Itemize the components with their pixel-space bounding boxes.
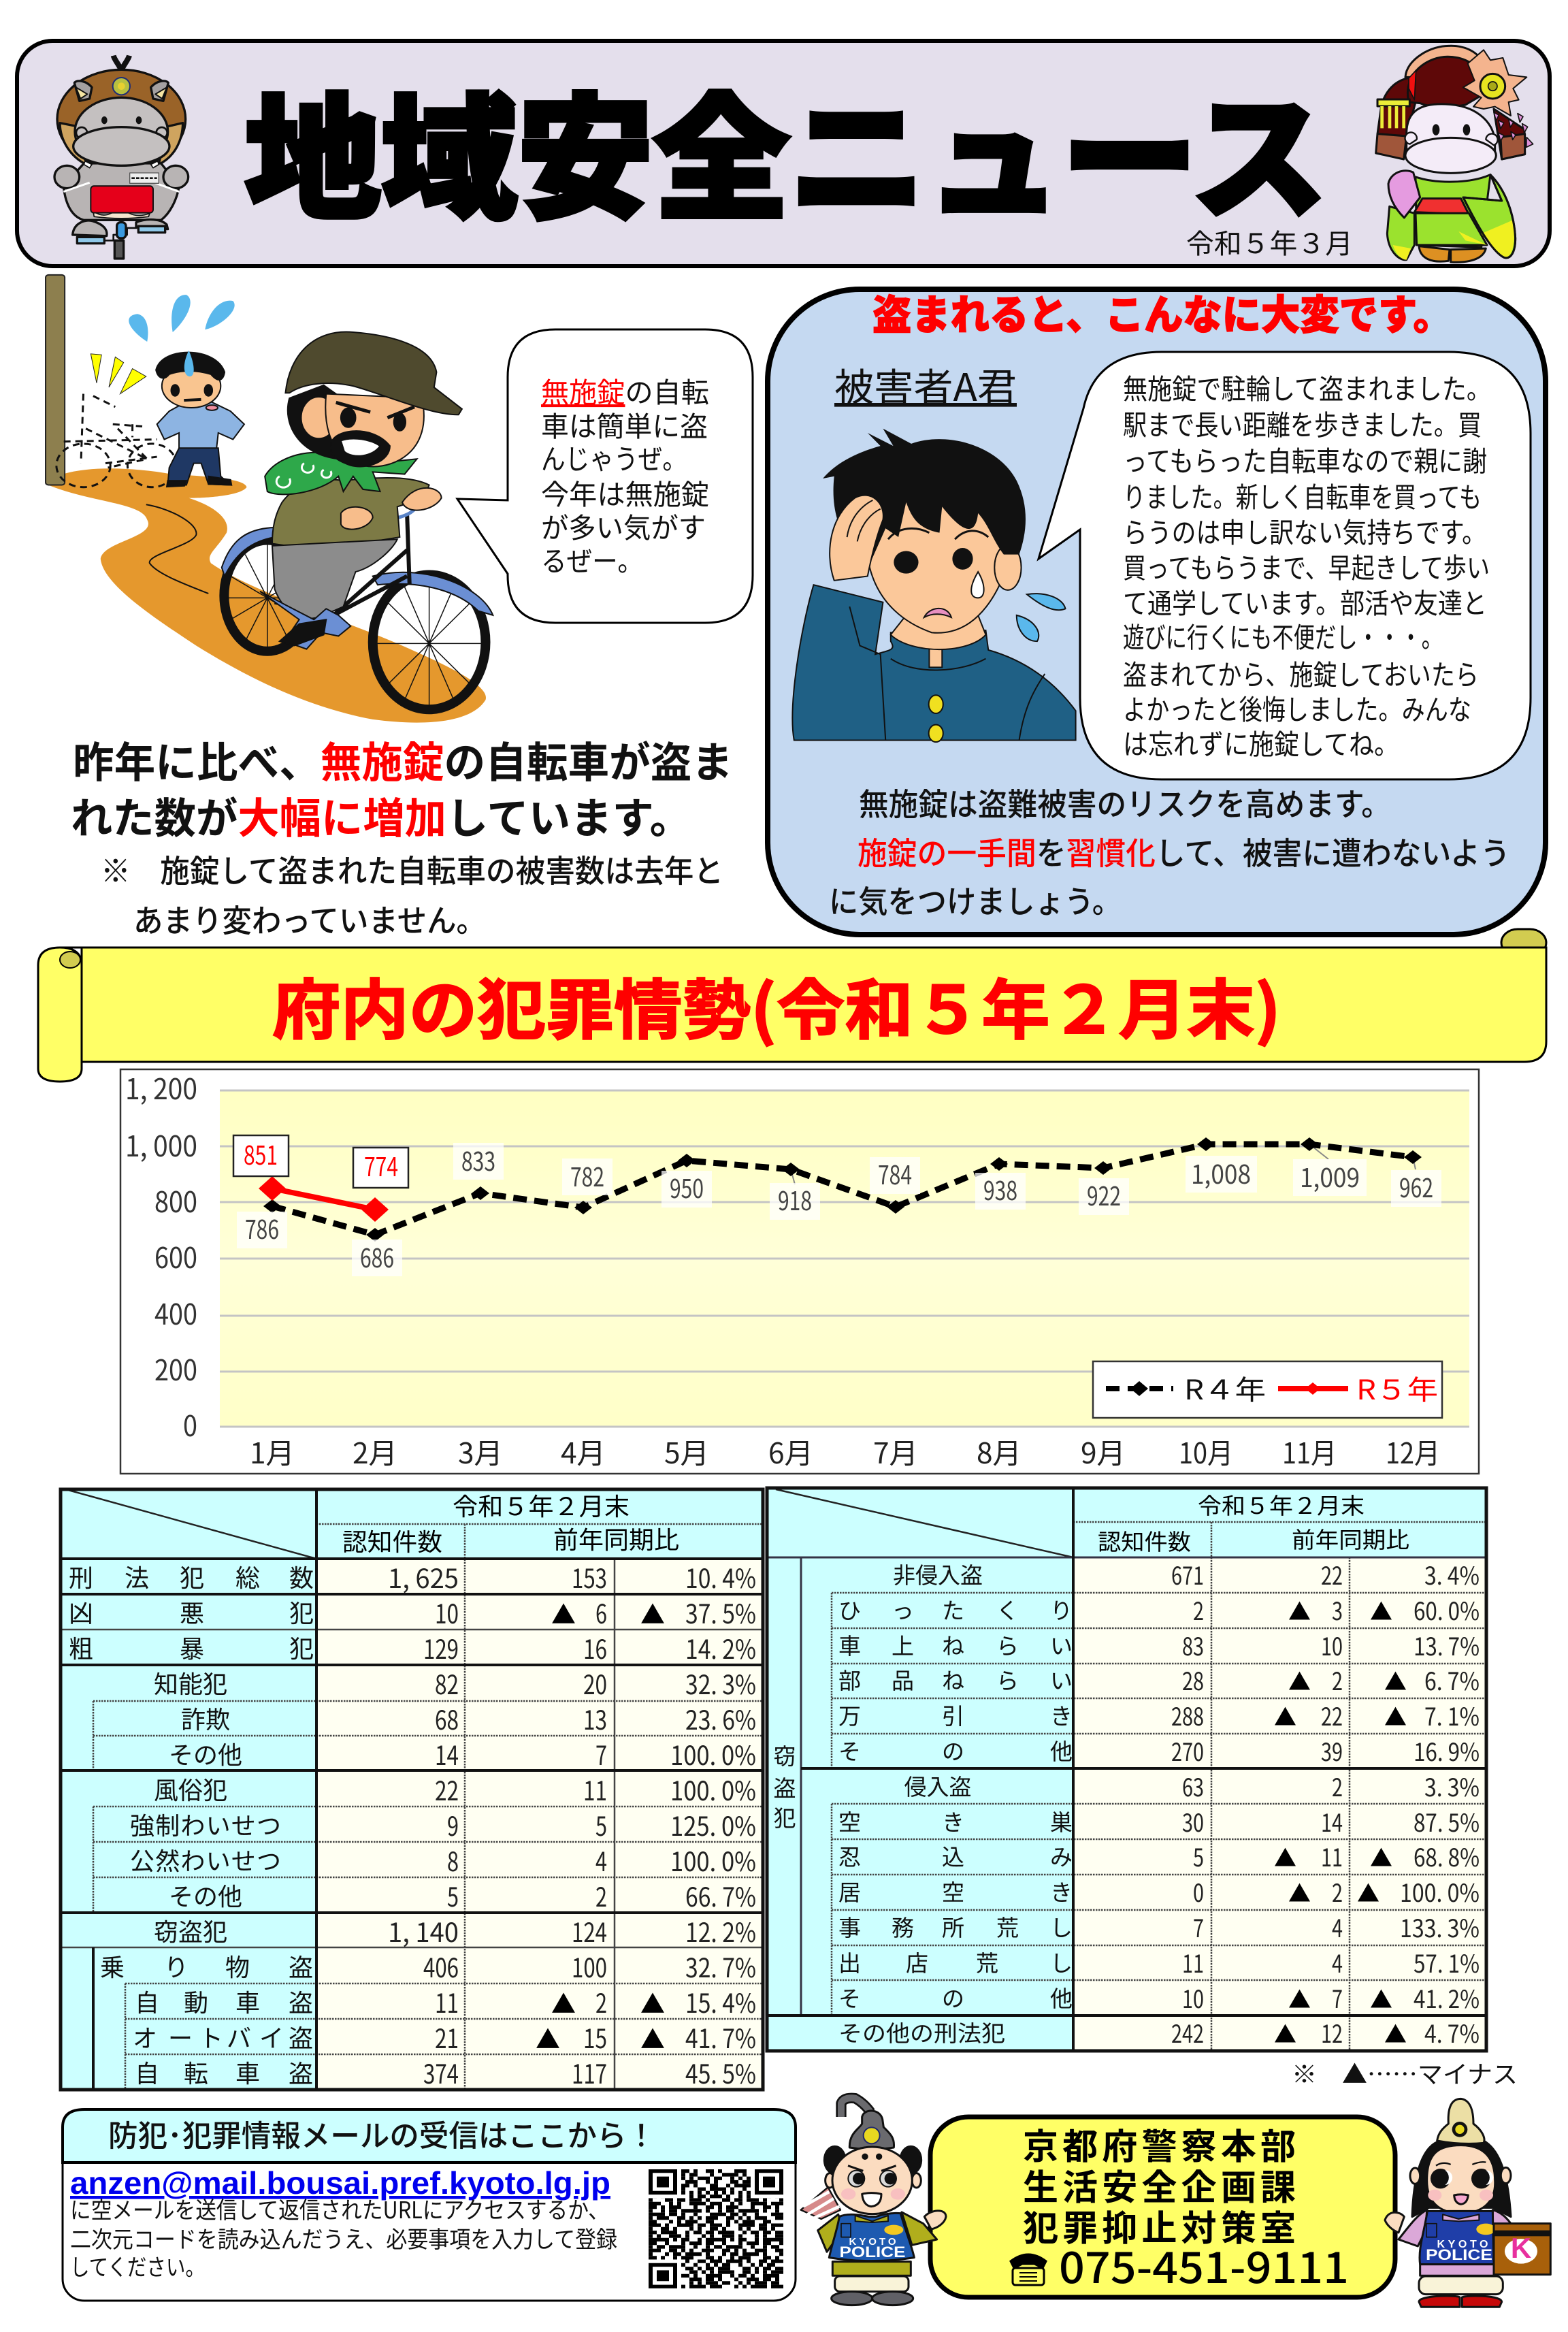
data labels <box>233 1135 1441 1276</box>
year-on-year change: ▲ <box>1288 1876 1311 1909</box>
legend: R５年 <box>1356 1368 1438 1408</box>
bubble text: て通学しています。部活や友達と <box>1123 581 1487 621</box>
icon: telephone <box>1011 2254 1046 2285</box>
contact text <box>1023 2118 1296 2251</box>
row labels: 空き巣 <box>838 1804 1073 1837</box>
text block: bicycle theft summary: 昨年に比べ、無施錠の自転車が盗ま <box>73 728 733 790</box>
boy <box>156 351 244 487</box>
row labels: 侵入盗 <box>904 1769 972 1802</box>
data labels: 782 <box>570 1156 604 1194</box>
mail instructions: に空メールを送信して返信されたURLにアクセスするか、 <box>70 2192 609 2225</box>
bubble text: るぜー。 <box>541 538 643 579</box>
x axis labels: 7月 <box>873 1431 918 1472</box>
percentage change: 68. 8% <box>1414 1839 1480 1874</box>
row labels: その他 <box>838 1734 1073 1766</box>
data labels: 938 <box>983 1170 1017 1208</box>
row labels <box>838 1557 1073 2048</box>
percentage change: ▲ <box>1370 1594 1392 1627</box>
year-on-year change: 3 <box>1332 1592 1343 1627</box>
mail instructions: してください。 <box>70 2249 205 2282</box>
row labels: その他 <box>169 1877 242 1913</box>
bubble text: らうのは申し訳ない気持ちです。 <box>1123 510 1486 551</box>
counts: 1, 140 <box>388 1912 459 1950</box>
counts: 129 <box>423 1629 459 1667</box>
percentage change: 100. 0% <box>1400 1874 1480 1909</box>
counts: 28 <box>1182 1662 1204 1698</box>
table header: 認知件数 <box>342 1523 442 1558</box>
counts: 2 <box>1193 1592 1204 1627</box>
percentage change: 133. 3% <box>1400 1909 1480 1945</box>
bubble text <box>1123 366 1491 762</box>
bubble text: 今年は無施錠 <box>541 472 709 513</box>
year-on-year change: 20 <box>583 1664 607 1702</box>
scroll banner <box>38 929 1546 1082</box>
row labels: 出店荒し <box>838 1945 1073 1978</box>
panel: thief on bicycle illustration <box>45 275 493 723</box>
year-on-year change: ▲ <box>1274 2017 1296 2050</box>
speech bubble: thief <box>457 329 753 623</box>
percentage change: 15. 4% <box>685 1983 756 2021</box>
counts: 7 <box>1193 1909 1204 1945</box>
year-on-year change: 15 <box>583 2018 607 2056</box>
percentage change: ▲ <box>1384 2017 1407 2050</box>
sweat drops <box>129 295 235 342</box>
bubble text: 遊びに行くにも不便だし・・・。 <box>1123 615 1443 655</box>
icon: maiko mascot right <box>1376 46 1533 262</box>
percentage change: 16. 9% <box>1414 1733 1480 1768</box>
thief head <box>288 385 424 466</box>
year-on-year change: 7 <box>1332 1980 1343 2015</box>
year-on-year change <box>536 1558 607 2092</box>
year-on-year change: 11 <box>583 1770 607 1809</box>
x axis labels: 8月 <box>977 1431 1022 1472</box>
percentage change: ▲ <box>1357 1876 1379 1909</box>
counts: 63 <box>1182 1768 1204 1804</box>
panel conclusion text: 施錠の一手間を習慣化して、被害に遭わないよう <box>858 829 1510 874</box>
data labels: 1,008 <box>1191 1154 1251 1191</box>
percentage change: 45. 5% <box>685 2054 756 2092</box>
year-on-year change: 12 <box>1321 2015 1343 2050</box>
counts: 10 <box>435 1593 459 1632</box>
row labels: 忍込み <box>838 1839 1073 1872</box>
row labels: 事務所荒し <box>838 1910 1073 1943</box>
panel heading: 盗まれると、こんなに大変です。 <box>872 282 1452 342</box>
x axis labels: 5月 <box>664 1431 709 1472</box>
counts: 374 <box>423 2054 459 2092</box>
percentage change: 32. 7% <box>685 1947 756 1986</box>
row labels: 非侵入盗 <box>893 1557 983 1590</box>
percentage change: 3. 4% <box>1424 1557 1480 1592</box>
text block: bicycle theft summary: れた数が大幅に増加しています。 <box>71 784 691 845</box>
data labels: 918 <box>778 1180 812 1218</box>
table: left crime statistics <box>61 1487 763 2092</box>
percentage change: 60. 0% <box>1414 1592 1480 1627</box>
header banner <box>17 41 1550 266</box>
percentage change: 66. 7% <box>685 1877 756 1915</box>
year-on-year change: 124 <box>572 1912 607 1950</box>
table header <box>342 1487 679 1558</box>
row labels: オートバイ盗 <box>133 2019 313 2054</box>
alert spikes <box>91 354 146 394</box>
percentage change <box>1357 1557 1480 2050</box>
percentage change: 37. 5% <box>685 1593 756 1632</box>
percentage change: 14. 2% <box>685 1629 756 1667</box>
legend <box>1093 1361 1442 1418</box>
row labels: その他 <box>838 1981 1073 2013</box>
vertical label: 窃 <box>773 1738 796 1771</box>
y axis labels: 200 <box>154 1348 197 1389</box>
row labels: 自転車盗 <box>135 2054 313 2090</box>
counts: 21 <box>435 2018 459 2056</box>
icon: police mascot male <box>801 2098 946 2305</box>
icon: police mascot female <box>1385 2099 1550 2307</box>
row labels: 公然わいせつ <box>130 1842 281 1877</box>
vertical label <box>773 1738 796 1833</box>
x axis labels: 6月 <box>768 1431 813 1472</box>
counts: 288 <box>1171 1698 1204 1733</box>
row labels: 風俗犯 <box>154 1771 227 1807</box>
percentage change: 6. 7% <box>1424 1662 1480 1698</box>
percentage change: 13. 7% <box>1414 1627 1480 1663</box>
percentage change: 57. 1% <box>1414 1945 1480 1980</box>
thief scarf <box>265 453 417 494</box>
counts: 14 <box>435 1735 459 1773</box>
title: 地域安全ニュース <box>245 51 1327 246</box>
panel: crime mail signup <box>63 2109 796 2301</box>
percentage change: 4. 7% <box>1424 2015 1480 2050</box>
panel conclusion text: に気をつけましょう。 <box>829 877 1122 922</box>
year-on-year change <box>1274 1557 1343 2050</box>
panel conclusion text: 無施錠は盗難被害のリスクを高めます。 <box>859 780 1391 825</box>
x axis labels: 10月 <box>1179 1431 1233 1472</box>
row labels: 凶悪犯 <box>69 1594 314 1630</box>
bubble text: 車は簡単に盗 <box>541 404 708 444</box>
x axis labels: 12月 <box>1386 1431 1440 1472</box>
legend: R４年 <box>1184 1368 1266 1408</box>
x axis labels: 2月 <box>353 1431 397 1472</box>
percentage change: 87. 5% <box>1414 1804 1480 1839</box>
year-on-year change: 14 <box>1321 1804 1343 1839</box>
year-on-year change: 39 <box>1321 1733 1343 1768</box>
counts: 22 <box>435 1770 459 1809</box>
icon: hippo mascot left <box>54 56 189 259</box>
row labels: 詐欺 <box>181 1700 230 1736</box>
year-on-year change: 2 <box>595 1983 607 2021</box>
percentage change: 7. 1% <box>1424 1698 1480 1733</box>
road line <box>146 504 208 594</box>
percentage change: 100. 0% <box>670 1735 756 1773</box>
mail heading: 防犯･犯罪情報メールの受信はここから！ <box>108 2111 656 2155</box>
counts: 10 <box>1182 1980 1204 2015</box>
mail instructions <box>70 2192 617 2282</box>
text block: bicycle theft summary <box>71 728 733 941</box>
counts: 5 <box>447 1877 459 1915</box>
year-on-year change: 10 <box>1321 1627 1343 1663</box>
year-on-year change: 2 <box>1332 1768 1343 1804</box>
counts: 0 <box>1193 1874 1204 1909</box>
row labels: ひったくり <box>838 1593 1073 1625</box>
year-on-year change: ▲ <box>1288 1982 1311 2015</box>
row labels: 車上ねらい <box>838 1628 1073 1661</box>
x axis labels: 4月 <box>561 1431 606 1472</box>
percentage change: 41. 2% <box>1414 1980 1480 2015</box>
row labels: 刑法犯総数 <box>69 1559 314 1594</box>
bubble text: 無施錠で駐輪して盗まれました。 <box>1123 366 1491 407</box>
data labels: 950 <box>670 1168 704 1205</box>
thief body <box>260 478 442 649</box>
year-on-year change: ▲ <box>551 1596 576 1631</box>
thief front wheel <box>373 575 485 709</box>
percentage change: 3. 3% <box>1424 1768 1480 1804</box>
percentage change: 41. 7% <box>685 2018 756 2056</box>
series: R5 <box>259 1176 389 1222</box>
year-on-year change: 2 <box>1332 1662 1343 1698</box>
vertical label: 盗 <box>773 1770 796 1803</box>
panel: victim story <box>768 282 1546 935</box>
percentage change: 23. 6% <box>685 1700 756 1738</box>
y axis labels: 1, 200 <box>125 1067 197 1108</box>
row labels <box>69 1559 314 2090</box>
percentage change <box>640 1558 756 2092</box>
year-on-year change: 5 <box>595 1806 607 1844</box>
table: right theft statistics <box>767 1488 1486 2051</box>
counts: 8 <box>447 1841 459 1879</box>
percentage change: ▲ <box>640 1596 665 1631</box>
row labels: 窃盗犯 <box>154 1913 227 1948</box>
percentage change: ▲ <box>1370 1982 1392 2015</box>
table header: 令和５年２月末 <box>453 1487 630 1523</box>
text block: bicycle theft summary: あまり変わっていません。 <box>133 896 486 941</box>
year-on-year change: 22 <box>1321 1557 1343 1592</box>
x axis labels: 3月 <box>458 1431 503 1472</box>
vertical label: 犯 <box>773 1800 796 1833</box>
counts: 270 <box>1171 1733 1204 1768</box>
QR code <box>649 2169 783 2288</box>
bubble text <box>541 370 709 579</box>
pole <box>46 275 65 485</box>
percentage change: 12. 2% <box>685 1912 756 1950</box>
row labels: 粗暴犯 <box>69 1630 314 1665</box>
series: R4 <box>263 1137 1422 1242</box>
year-on-year change: 11 <box>1321 1839 1343 1874</box>
row labels: 知能犯 <box>154 1665 227 1700</box>
mail address: anzen@mail.bousai.pref.kyoto.lg.jp <box>70 2165 610 2201</box>
speech bubble: victim <box>1039 352 1531 779</box>
x axis labels: 9月 <box>1081 1431 1126 1472</box>
bubble text: 買ってもらうまで、早起きして歩い <box>1123 545 1490 586</box>
contact text: 生活安全企画課 <box>1023 2159 1296 2210</box>
percentage change: ▲ <box>1384 1700 1407 1732</box>
counts <box>1171 1557 1204 2050</box>
y axis labels <box>125 1067 197 1445</box>
counts: 242 <box>1171 2015 1204 2050</box>
x axis labels: 1月 <box>250 1431 295 1472</box>
percentage change: 125. 0% <box>670 1806 756 1844</box>
year-on-year change: 2 <box>595 1877 607 1915</box>
bubble text: ってもらった自転車なので親に謝 <box>1123 438 1487 479</box>
year-on-year change: 117 <box>572 2054 607 2092</box>
counts: 671 <box>1171 1557 1204 1592</box>
counts: 11 <box>1182 1945 1204 1980</box>
stolen bicycle outline <box>56 394 176 487</box>
year-on-year change: 6 <box>595 1593 607 1632</box>
year-on-year change: 22 <box>1321 1698 1343 1733</box>
percentage change: ▲ <box>1370 1841 1392 1873</box>
table footnote: ※ ▲……マイナス <box>1292 2055 1518 2090</box>
data labels: 686 <box>360 1237 394 1275</box>
x axis labels <box>250 1431 1440 1472</box>
counts <box>388 1558 459 2092</box>
y axis labels: 400 <box>154 1292 197 1333</box>
counts: 30 <box>1182 1804 1204 1839</box>
bubble text: 無施錠の自転 <box>541 370 709 410</box>
year-on-year change: 100 <box>572 1947 607 1986</box>
counts: 5 <box>1193 1839 1204 1874</box>
counts: 83 <box>1182 1627 1204 1663</box>
icon: police mascot female: POLICE <box>1426 2246 1492 2263</box>
row labels: 自動車盗 <box>135 1983 313 2019</box>
counts: 68 <box>435 1700 459 1738</box>
bicycle frame <box>275 515 410 615</box>
year-on-year change: 13 <box>583 1700 607 1738</box>
year-on-year change: 4 <box>1332 1909 1343 1945</box>
counts: 406 <box>423 1947 459 1986</box>
bubble text: よかったと後悔しました。みんな <box>1123 687 1471 728</box>
row labels: その他 <box>169 1736 242 1771</box>
contact text: 京都府警察本部 <box>1023 2118 1296 2169</box>
x axis labels: 11月 <box>1282 1431 1337 1472</box>
data labels: 922 <box>1087 1176 1121 1213</box>
data labels: 1,009 <box>1300 1157 1360 1195</box>
badge text: KYOTO <box>1437 2239 1488 2250</box>
year-on-year change: 4 <box>595 1841 607 1879</box>
year-on-year change: ▲ <box>1288 1594 1311 1627</box>
y axis labels: 0 <box>183 1404 197 1445</box>
logo letter: K <box>1511 2232 1531 2264</box>
row labels: 乗り物盗 <box>100 1948 313 1983</box>
row labels: 強制わいせつ <box>130 1807 281 1842</box>
badge text: KYOTO <box>849 2236 896 2248</box>
date: 令和５年３月 <box>1186 222 1353 261</box>
data labels: 833 <box>461 1141 495 1178</box>
percentage change: 10. 4% <box>685 1558 756 1596</box>
percentage change: ▲ <box>640 2020 665 2056</box>
plot area <box>220 1090 1469 1427</box>
panel: police contact <box>930 2117 1395 2297</box>
year-on-year change: ▲ <box>1274 1700 1296 1732</box>
victim label: 被害者A君 <box>834 357 1017 412</box>
mail instructions: 二次元コードを読み込んだうえ、必要事項を入力して登録 <box>70 2221 617 2254</box>
contact text: 犯罪抑止対策室 <box>1023 2200 1296 2251</box>
table header: 認知件数 <box>1098 1524 1191 1557</box>
data labels: 774 <box>364 1146 398 1184</box>
bubble text: りました。新しく自転車を買っても <box>1123 474 1482 515</box>
year-on-year change: ▲ <box>536 2020 560 2056</box>
year-on-year change: 2 <box>1332 1874 1343 1909</box>
leader lines <box>791 1144 1416 1184</box>
road <box>45 468 486 723</box>
line chart <box>120 1067 1479 1474</box>
icon: police mascot male: POLICE <box>840 2244 905 2261</box>
banner heading: 府内の犯罪情勢(令和５年２月末) <box>272 958 1281 1052</box>
year-on-year change: ▲ <box>551 1985 576 2020</box>
table header <box>1098 1488 1409 1557</box>
counts: 1, 625 <box>388 1558 459 1596</box>
thief rear wheel <box>224 540 310 651</box>
bubble text: 駅まで長い距離を歩きました。買 <box>1123 402 1482 443</box>
bubble text: が多い気がす <box>541 505 706 546</box>
year-on-year change: 7 <box>595 1735 607 1773</box>
data labels: 784 <box>878 1154 912 1192</box>
bubble text: 盗まれてから、施錠しておいたら <box>1123 652 1479 693</box>
row labels: 万引き <box>838 1698 1073 1731</box>
data labels: 851 <box>244 1135 278 1172</box>
counts: 9 <box>447 1806 459 1844</box>
year-on-year change: 16 <box>583 1629 607 1667</box>
thief cap <box>285 332 462 415</box>
counts: 11 <box>435 1983 459 2021</box>
year-on-year change: ▲ <box>1288 1664 1311 1697</box>
data labels: 786 <box>245 1209 279 1246</box>
table header: 前年同期比 <box>553 1521 679 1556</box>
panel conclusion text <box>829 780 1510 922</box>
y axis labels: 600 <box>154 1235 197 1277</box>
bubble text: んじゃうぜ。 <box>541 436 687 477</box>
percentage change: ▲ <box>1384 1664 1407 1697</box>
percentage change: 100. 0% <box>670 1841 756 1879</box>
year-on-year change: ▲ <box>1274 1841 1296 1873</box>
phone number: 075-451-9111 <box>1059 2234 1349 2295</box>
icon: worried boy <box>792 429 1076 742</box>
y axis labels: 1, 000 <box>125 1124 197 1165</box>
row labels: 居空き <box>838 1875 1073 1907</box>
year-on-year change: 153 <box>572 1558 607 1596</box>
bubble text: は忘れずに施錠してね。 <box>1123 722 1399 762</box>
text block: bicycle theft summary: ※ 施錠して盗まれた自転車の被害数は去年と <box>101 847 723 892</box>
y axis labels: 800 <box>154 1180 197 1221</box>
year-on-year change: 4 <box>1332 1945 1343 1980</box>
percentage change: 32. 3% <box>685 1664 756 1702</box>
row labels: 部品ねらい <box>838 1663 1073 1696</box>
table header: 令和５年２月末 <box>1198 1488 1365 1521</box>
data labels: 962 <box>1399 1167 1433 1205</box>
row labels: その他の刑法犯 <box>838 2015 1005 2048</box>
counts: 82 <box>435 1664 459 1702</box>
percentage change: ▲ <box>640 1985 665 2020</box>
table header: 前年同期比 <box>1292 1522 1409 1555</box>
percentage change: 100. 0% <box>670 1770 756 1809</box>
